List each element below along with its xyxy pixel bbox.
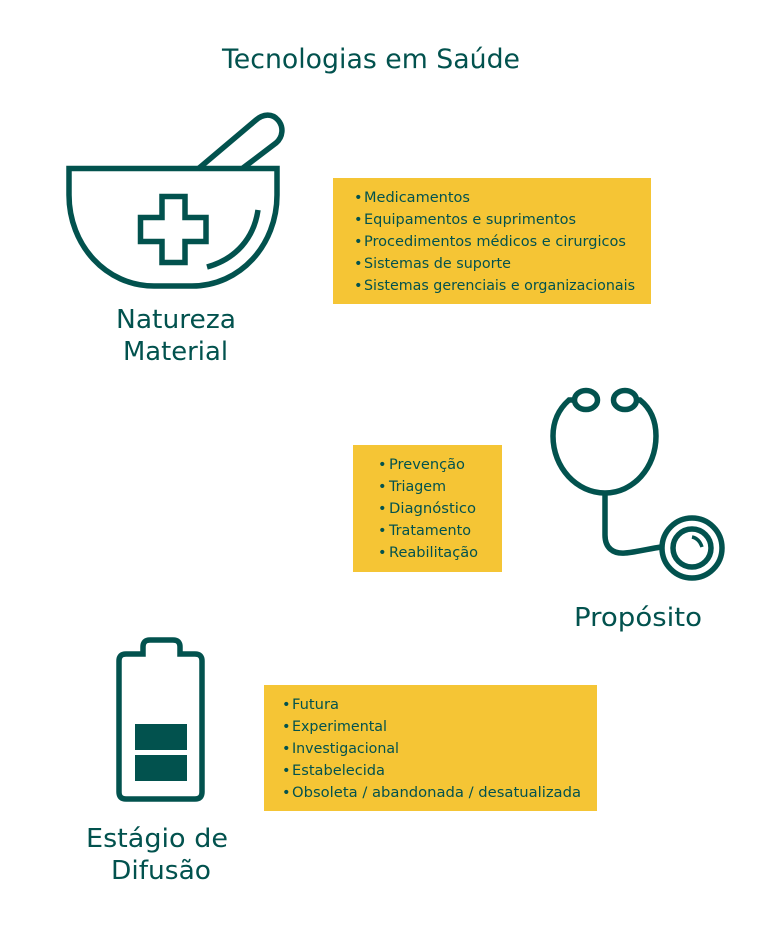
panel: natureza material list: Procedimentos médicos e cirurgicos: [364, 234, 626, 250]
panel: natureza material list: Sistemas gerenciais e organizacionais: [364, 278, 635, 294]
panel: propósito list: •: [378, 479, 387, 495]
label: Natureza Material: [116, 305, 236, 367]
panel: estágio de difusão list: •: [282, 719, 291, 735]
panel: estágio de difusão list: Futura: [292, 697, 339, 713]
panel: propósito list: [353, 445, 502, 572]
label: Estágio de Difusão: Difusão: [111, 856, 211, 886]
icon: battery: [119, 640, 202, 799]
panel: natureza material list: [333, 178, 651, 304]
panel: estágio de difusão list: Investigacional: [292, 741, 399, 757]
panel: estágio de difusão list: [264, 685, 597, 811]
panel: estágio de difusão list: •: [282, 763, 291, 779]
panel: propósito list: Reabilitação: [389, 545, 478, 561]
panel: natureza material list: Medicamentos: [364, 190, 470, 206]
panel: propósito list: Prevenção: [389, 457, 465, 473]
panel: estágio de difusão list: •: [282, 697, 291, 713]
panel: natureza material list: •: [354, 212, 363, 228]
label: Estágio de Difusão: [86, 824, 228, 886]
panel: propósito list: Diagnóstico: [389, 501, 476, 517]
panel: natureza material list: Equipamentos e suprimentos: [364, 212, 576, 228]
panel: estágio de difusão list: Obsoleta / abandonada / desatualizada: [292, 785, 581, 801]
panel: natureza material list: Sistemas de suporte: [364, 256, 511, 272]
panel: estágio de difusão list: Estabelecida: [292, 763, 385, 779]
panel: estágio de difusão list: Experimental: [292, 719, 387, 735]
title: Tecnologias em Saúde: [221, 44, 520, 75]
panel: estágio de difusão list: •: [282, 741, 291, 757]
panel: propósito list: •: [378, 523, 387, 539]
label: Estágio de Difusão: Estágio de: [86, 824, 228, 854]
panel: propósito list: •: [378, 545, 387, 561]
panel: natureza material list: •: [354, 234, 363, 250]
label: Propósito: Propósito: [574, 603, 702, 633]
panel: natureza material list: •: [354, 256, 363, 272]
icon: stethoscope: [553, 390, 722, 578]
panel: propósito list: •: [378, 457, 387, 473]
panel: propósito list: Triagem: [388, 479, 446, 495]
label: Natureza Material: Material: [123, 337, 228, 367]
panel: estágio de difusão list: •: [282, 785, 291, 801]
label: Natureza Material: Natureza: [116, 305, 236, 335]
panel: natureza material list: •: [354, 190, 363, 206]
panel: propósito list: •: [378, 501, 387, 517]
panel: natureza material list: •: [354, 278, 363, 294]
icon: mortar and pestle: [69, 115, 282, 286]
panel: propósito list: Tratamento: [388, 523, 471, 539]
